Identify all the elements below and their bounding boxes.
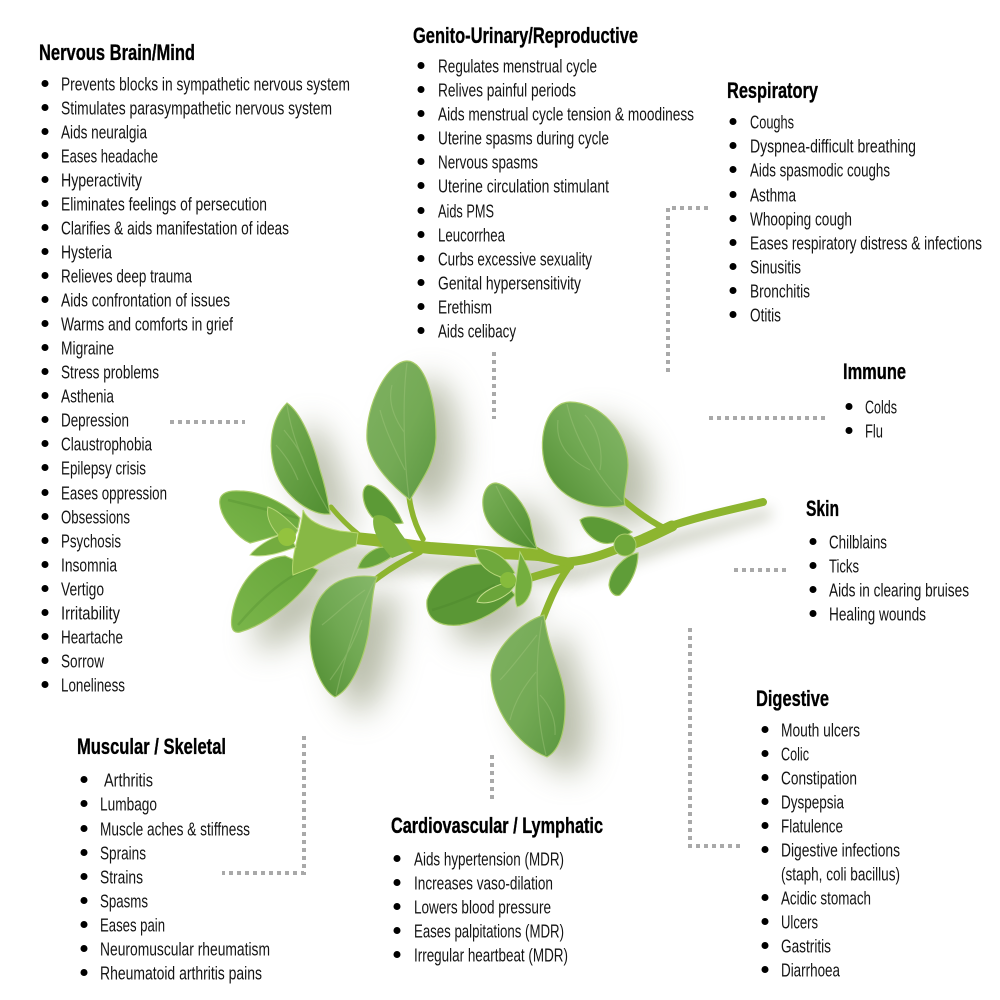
- list: nervous: Migraine: [61, 338, 114, 358]
- list: respiratory: Otitis: [750, 305, 781, 325]
- connector: nervous: [170, 420, 245, 424]
- connector: genito-urinary: [492, 352, 496, 419]
- list: nervous: [61, 74, 350, 695]
- heading: skin: Skin: [806, 496, 839, 521]
- list: respiratory: Asthma: [750, 185, 797, 205]
- list: genito-urinary: Aids PMS: [438, 201, 494, 221]
- list: nervous: Relieves deep trauma: [61, 266, 193, 286]
- list: digestive: (staph, coli bacillus): [781, 864, 900, 884]
- list: muscular: Arthritis: [104, 770, 153, 790]
- leaf: small right upper: [580, 517, 632, 543]
- heading: digestive: Digestive: [756, 686, 829, 711]
- list: respiratory: Bronchitis: [750, 281, 810, 301]
- list: immune: [865, 397, 897, 441]
- list: respiratory: Sinusitis: [750, 257, 801, 277]
- list: digestive: Diarrhoea: [781, 960, 841, 980]
- list: digestive: Ulcers: [781, 912, 818, 932]
- list: nervous: Depression: [61, 410, 129, 430]
- list: digestive: Flatulence: [781, 816, 843, 836]
- bud cluster: middle: [475, 534, 636, 607]
- bullets: nervous: [42, 80, 48, 688]
- heading: muscular: Muscular / Skeletal: [77, 734, 226, 759]
- list: respiratory: Whooping cough: [750, 209, 852, 229]
- heading: respiratory: Respiratory: [727, 78, 819, 103]
- list: skin: Ticks: [829, 556, 859, 576]
- list: digestive: Digestive infections: [781, 840, 900, 860]
- panel: digestive: [756, 686, 900, 980]
- list: nervous: Epilepsy crisis: [61, 458, 146, 478]
- bullets: cardiovascular: [394, 855, 400, 958]
- list: respiratory: [750, 112, 982, 325]
- list: muscular: Lumbago: [100, 794, 157, 814]
- leaf: lower left: [231, 556, 318, 632]
- leaf: small lower centre: [358, 547, 394, 568]
- list: nervous: Aids neuralgia: [61, 122, 148, 142]
- bullets: skin: [810, 538, 816, 617]
- list: immune: Flu: [865, 421, 883, 441]
- connector: muscular: [222, 736, 304, 873]
- list: cardiovascular: Irregular heartbeat (MDR): [414, 945, 568, 965]
- list: nervous: Hysteria: [61, 242, 113, 262]
- list: nervous: Claustrophobia: [61, 434, 153, 454]
- connector: skin: [734, 568, 786, 572]
- leaf: bottom large: [491, 615, 565, 757]
- panel: genito-urinary/reproductive: [413, 23, 694, 341]
- bullets: muscular: [80, 776, 88, 976]
- list: genito-urinary: Nervous spasms: [438, 152, 538, 172]
- list: muscular: Eases pain: [100, 915, 165, 935]
- leaf: small right lower: [609, 553, 638, 596]
- connector: digestive: [690, 628, 740, 846]
- list: nervous: Stress problems: [61, 362, 159, 382]
- panel: muscular / skeletal: [77, 734, 270, 983]
- leaf: mid dark: [427, 564, 515, 625]
- list: respiratory: Coughs: [750, 112, 794, 132]
- list: genito-urinary: Genital hypersensitivity: [438, 273, 581, 293]
- list: nervous: Irritability: [61, 603, 120, 623]
- list: respiratory: Aids spasmodic coughs: [750, 160, 890, 180]
- list: skin: [829, 532, 969, 624]
- list: genito-urinary: Relives painful periods: [438, 80, 576, 100]
- list: respiratory: Dyspnea-difficult breathing: [750, 136, 916, 156]
- leaf: right large: [542, 402, 628, 507]
- panel: skin: [806, 496, 969, 624]
- list: nervous: Vertigo: [61, 579, 104, 599]
- list: nervous: Psychosis: [61, 531, 121, 551]
- bud cluster: left: [250, 507, 413, 575]
- list: digestive: [781, 720, 900, 980]
- list: nervous: Sorrow: [61, 651, 105, 671]
- bullets: respiratory: [730, 118, 736, 318]
- list: cardiovascular: Lowers blood pressure: [414, 897, 551, 917]
- plant: marjoram sprig: [220, 361, 771, 775]
- heading: immune: Immune: [843, 359, 906, 384]
- list: genito-urinary: Aids menstrual cycle tension & moodiness: [438, 104, 694, 124]
- list: digestive: Acidic stomach: [781, 888, 871, 908]
- list: cardiovascular: Eases palpitations (MDR): [414, 921, 564, 941]
- stems: [331, 496, 763, 618]
- heading: nervous: Nervous Brain/Mind: [39, 40, 195, 65]
- list: skin: Healing wounds: [829, 604, 926, 624]
- heading: cardiovascular: Cardiovascular / Lymphatic: [391, 813, 603, 838]
- list: muscular: Neuromuscular rheumatism: [100, 939, 270, 959]
- bullets: genito-urinary: [418, 62, 424, 334]
- list: digestive: Colic: [781, 744, 809, 764]
- list: nervous: Insomnia: [61, 555, 118, 575]
- list: cardiovascular: Aids hypertension (MDR): [414, 849, 564, 869]
- list: muscular: Spasms: [100, 891, 148, 911]
- list: nervous: Clarifies & aids manifestation of ideas: [61, 218, 289, 238]
- list: muscular: Strains: [100, 867, 143, 887]
- leaf: mid small upper: [483, 483, 537, 549]
- list: nervous: Asthenia: [61, 386, 115, 406]
- plant shadow: [255, 379, 771, 775]
- bullets: immune: [846, 403, 852, 434]
- panel: respiratory: [727, 78, 982, 325]
- list: immune: Colds: [865, 397, 897, 417]
- list: genito-urinary: [438, 56, 694, 341]
- list: genito-urinary: Uterine circulation stimulant: [438, 176, 609, 196]
- list: muscular: [100, 770, 270, 983]
- heading: genito-urinary: Genito-Urinary/Reproductive: [413, 23, 638, 48]
- list: muscular: Muscle aches & stiffness: [100, 819, 250, 839]
- list: digestive: Gastritis: [781, 936, 831, 956]
- list: genito-urinary: Erethism: [438, 297, 492, 317]
- list: cardiovascular: Increases vaso-dilation: [414, 873, 553, 893]
- leaf: tall top: [367, 361, 436, 500]
- panel: immune: [843, 359, 906, 441]
- connector: cardiovascular: [490, 755, 494, 799]
- leaf: bottom centre left: [310, 576, 377, 697]
- list: nervous: Aids confrontation of issues: [61, 290, 230, 310]
- list: nervous: Loneliness: [61, 675, 125, 695]
- list: digestive: Mouth ulcers: [781, 720, 860, 740]
- list: genito-urinary: Leucorrhea: [438, 225, 506, 245]
- list: nervous: Warms and comforts in grief: [61, 314, 234, 334]
- list: digestive: Constipation: [781, 768, 857, 788]
- leaf: small upper centre: [363, 485, 403, 524]
- list: genito-urinary: Aids celibacy: [438, 321, 516, 341]
- bullets: digestive: [762, 726, 768, 973]
- list: nervous: Hyperactivity: [61, 170, 142, 190]
- leaf: far left: [220, 491, 300, 543]
- list: nervous: Eases oppression: [61, 483, 167, 503]
- list: digestive: Dyspepsia: [781, 792, 845, 812]
- panel: nervous brain/mind: [39, 40, 350, 695]
- list: cardiovascular: [414, 849, 568, 965]
- list: nervous: Heartache: [61, 627, 123, 647]
- list: genito-urinary: Curbs excessive sexuality: [438, 249, 592, 269]
- list: genito-urinary: Uterine spasms during cycle: [438, 128, 609, 148]
- list: muscular: Sprains: [100, 843, 146, 863]
- list: muscular: Rheumatoid arthritis pains: [100, 963, 262, 983]
- list: nervous: Eliminates feelings of persecution: [61, 194, 267, 214]
- list: skin: Chilblains: [829, 532, 887, 552]
- connector: immune: [709, 416, 825, 420]
- list: nervous: Eases headache: [61, 146, 158, 166]
- leaf: upper left: [271, 403, 330, 514]
- connector: respiratory: [668, 208, 708, 376]
- panel: cardiovascular / lymphatic: [391, 813, 603, 965]
- list: genito-urinary: Regulates menstrual cycle: [438, 56, 597, 76]
- list: nervous: Stimulates parasympathetic nervous system: [61, 98, 332, 118]
- list: nervous: Prevents blocks in sympathetic nervous system: [61, 74, 350, 94]
- list: nervous: Obsessions: [61, 507, 130, 527]
